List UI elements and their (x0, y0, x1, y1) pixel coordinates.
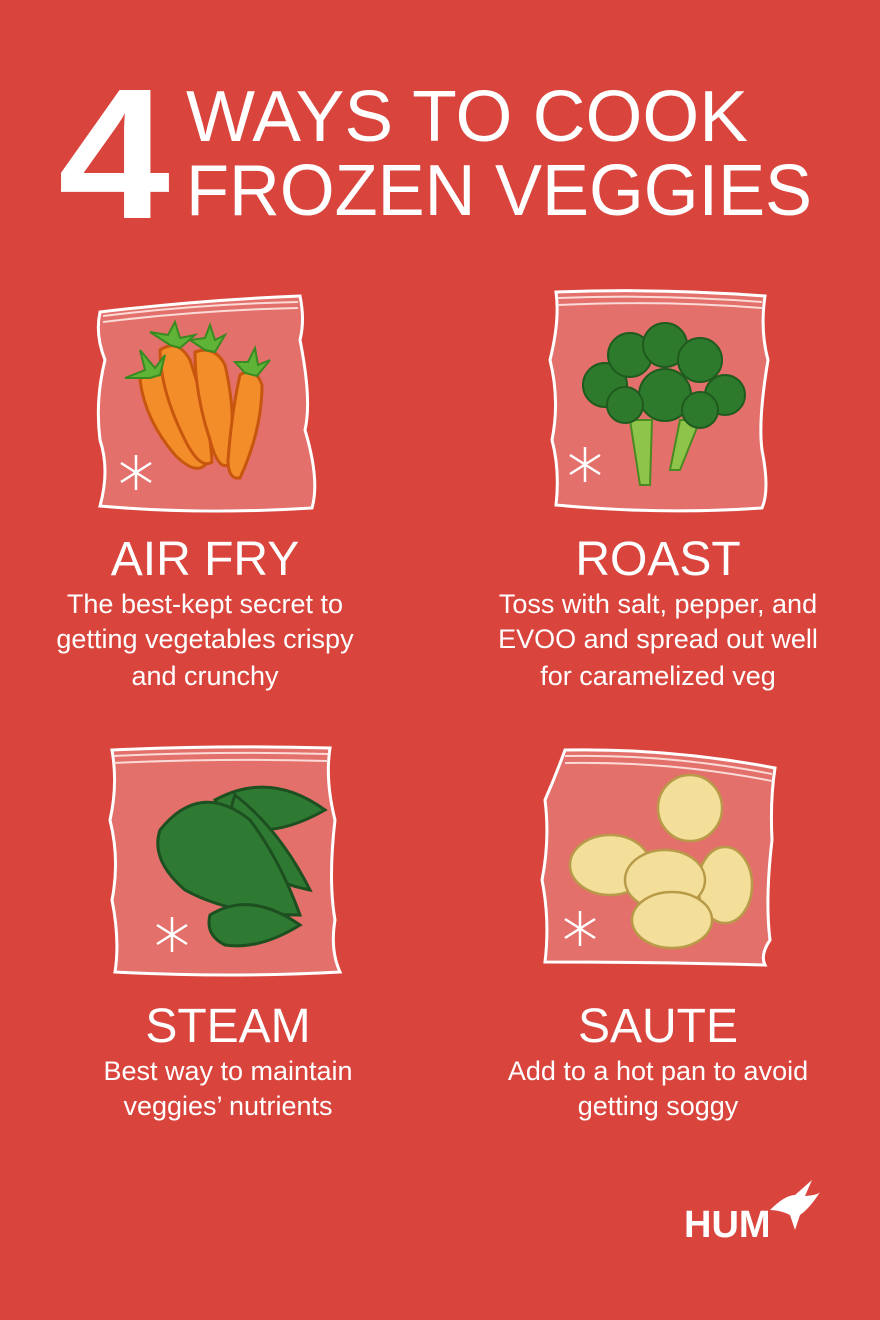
logo: HUM (684, 1180, 820, 1246)
icon: snowflake (570, 447, 600, 482)
title: WAYS TO COOK (186, 77, 748, 157)
section: roast: for caramelized veg (540, 661, 776, 691)
section: steam: Best way to maintain (103, 1056, 353, 1086)
icon: broccoli (583, 323, 745, 485)
section: roast (498, 533, 818, 691)
section: saute: SAUTE (578, 1000, 738, 1053)
title: FROZEN VEGGIES (186, 151, 812, 231)
icon: snowflake (121, 455, 151, 490)
section: roast: ROAST (575, 533, 741, 586)
icon: carrots (140, 346, 262, 478)
section: roast: Toss with salt, pepper, and (499, 589, 817, 619)
bag: spinach (110, 747, 340, 975)
section: steam: STEAM (145, 1000, 311, 1053)
bag: carrots (98, 296, 315, 511)
section: air fry: getting vegetables crispy (56, 624, 354, 654)
icon: spinach (158, 787, 325, 946)
section: steam (103, 1000, 353, 1121)
title (58, 51, 812, 258)
section: air fry (56, 533, 354, 691)
icon: snowflake (157, 917, 187, 952)
logo: HUM: HUM (684, 1204, 771, 1246)
section: steam: veggies’ nutrients (123, 1091, 333, 1121)
section: air fry: and crunchy (131, 661, 279, 691)
section: saute (508, 1000, 808, 1121)
bag: potatoes (542, 750, 775, 965)
icon: potatoes (570, 775, 752, 948)
section: roast: EVOO and spread out well (498, 624, 818, 654)
section: saute: getting soggy (578, 1091, 739, 1121)
section: air fry: The best-kept secret to (67, 589, 343, 619)
section: saute: Add to a hot pan to avoid (508, 1056, 808, 1086)
section: air fry: AIR FRY (111, 533, 299, 586)
bag: broccoli (550, 291, 768, 511)
icon: snowflake (565, 911, 595, 946)
title: 4 (58, 51, 170, 258)
